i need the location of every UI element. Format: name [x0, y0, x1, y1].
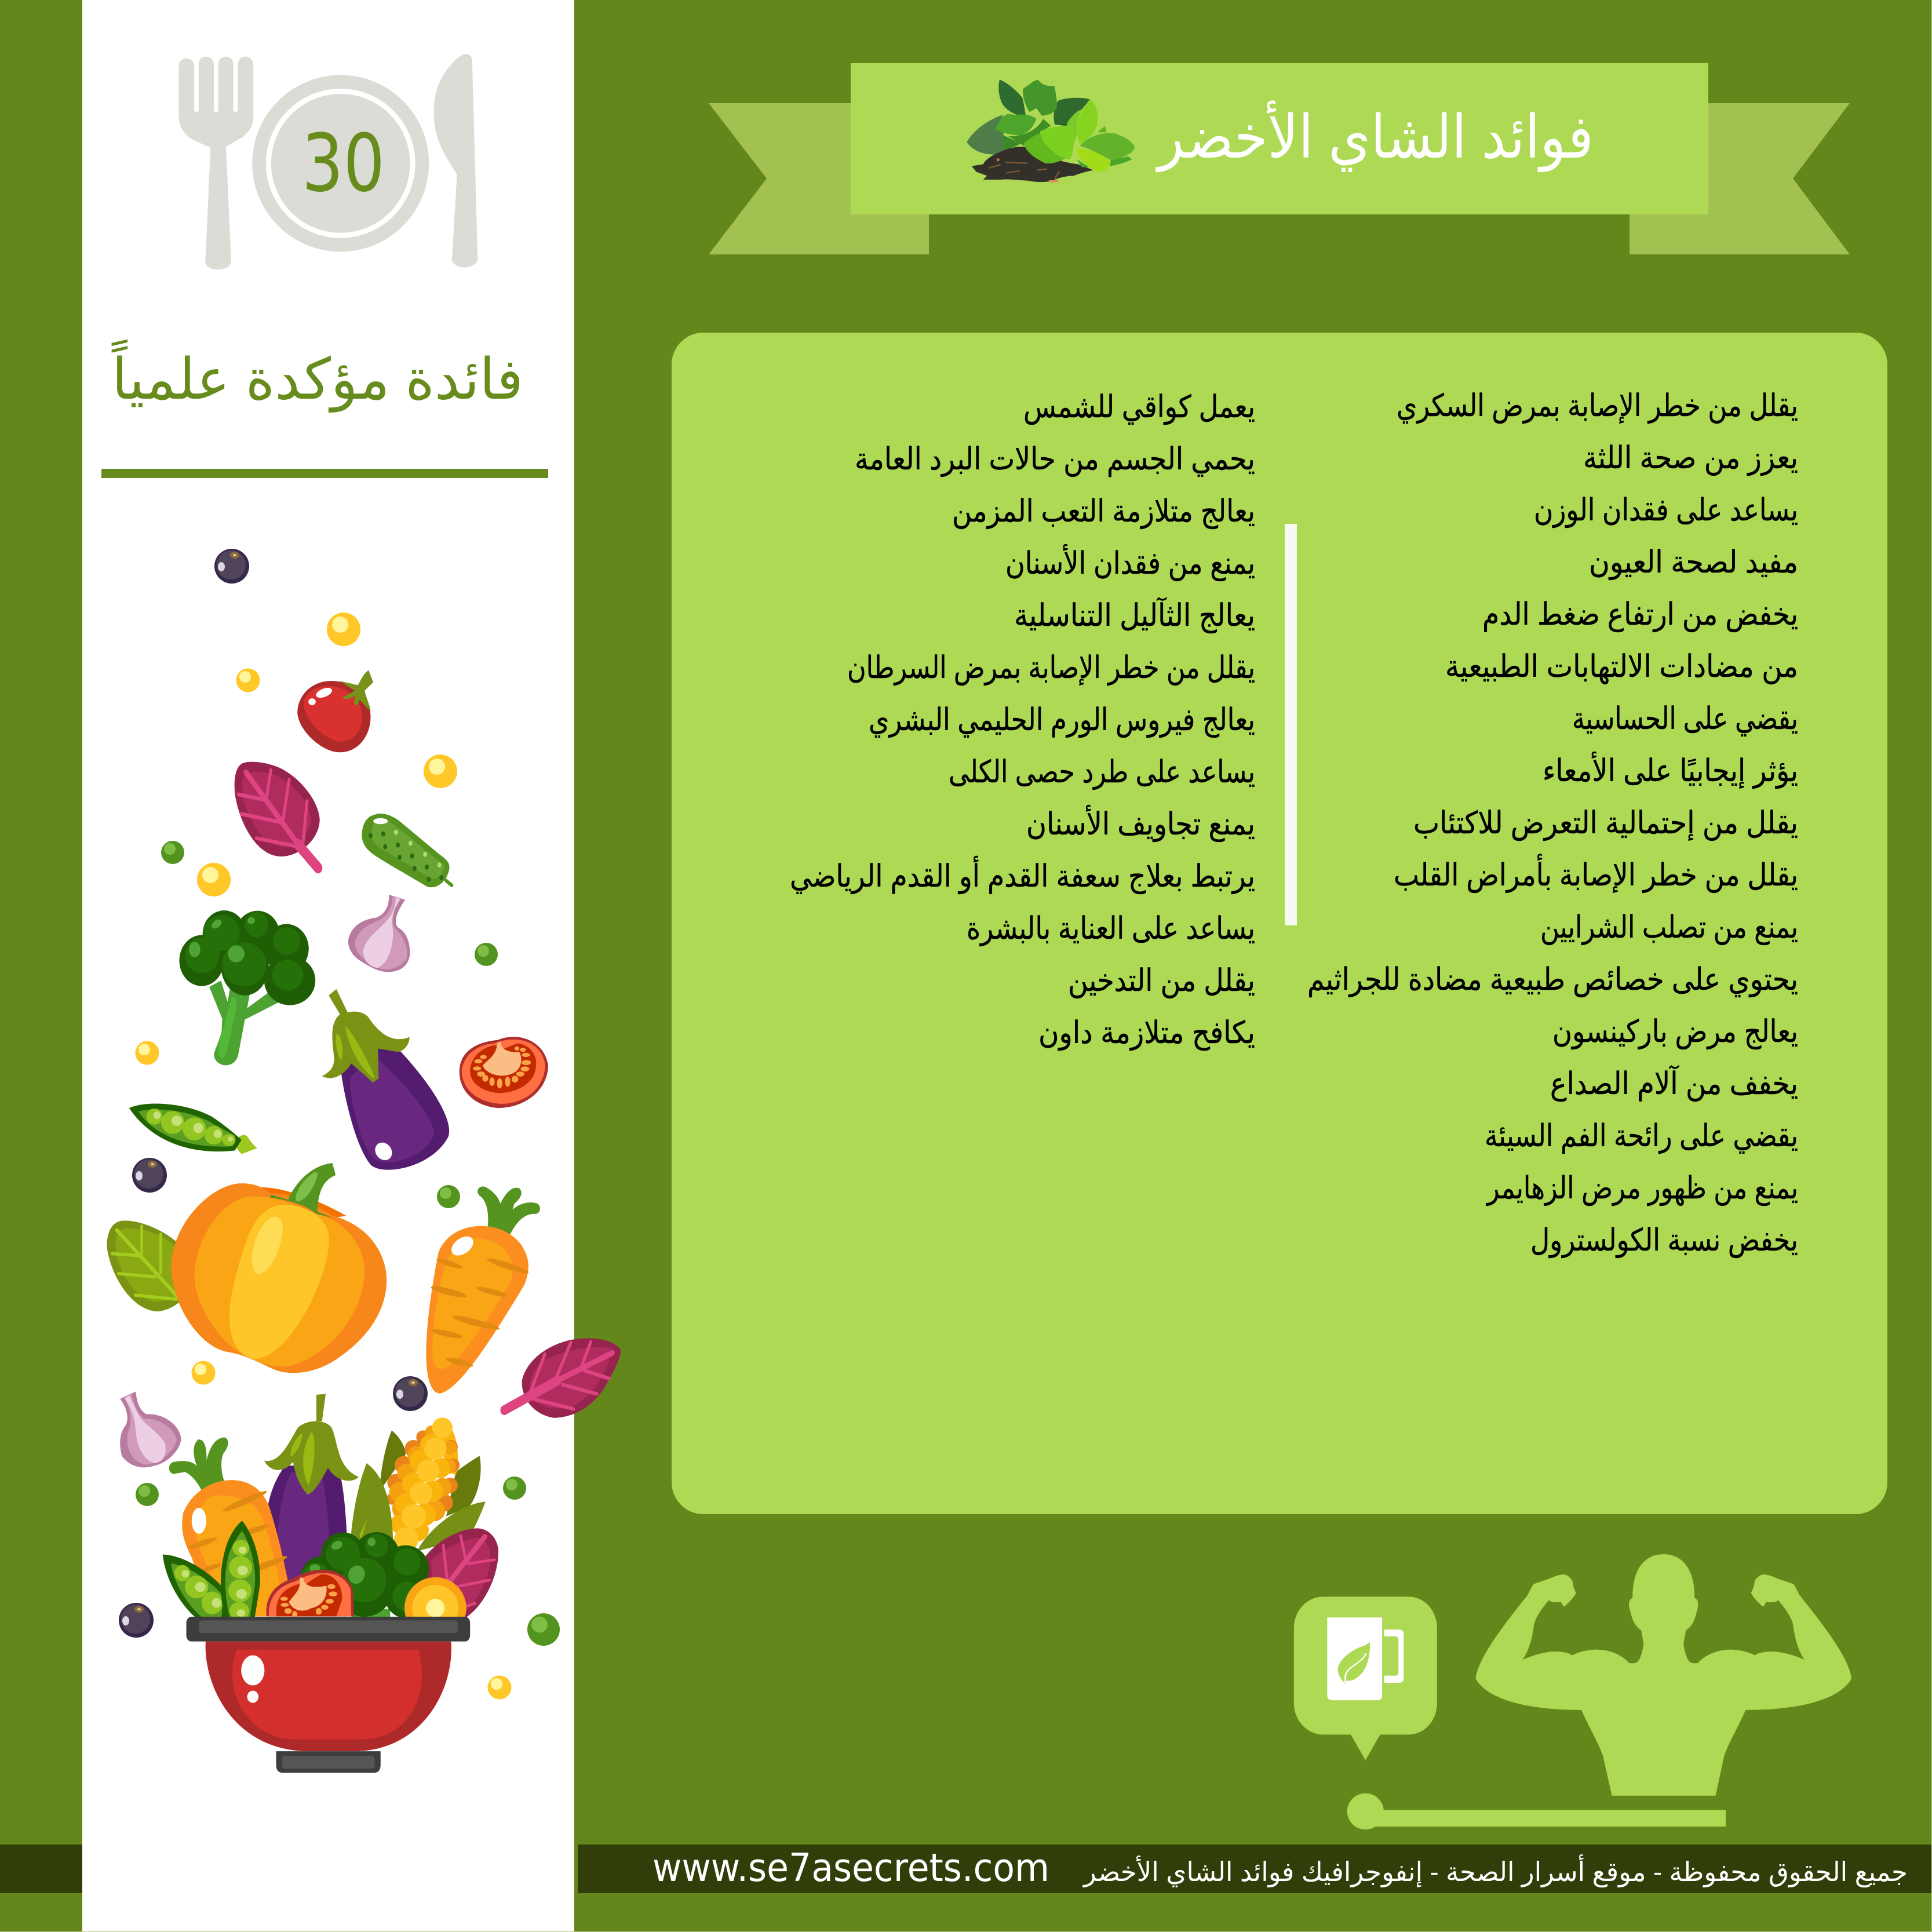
- icon: pumpkin: [171, 1163, 387, 1373]
- icon: red leaf overlapping green column: [504, 1338, 621, 1418]
- icon: red bowl: [187, 1617, 470, 1773]
- icon: eggplant: [322, 989, 449, 1170]
- footer: copyright text: جميع الحقوق محفوظة - موقع أسرار الصحة - إنفوجرافيك فوائد الشاي الأخضر: [1082, 1854, 1908, 1888]
- footer bar: right segment: [578, 1844, 1932, 1893]
- divider: sidebar underline: [101, 469, 548, 478]
- heading: sidebar title: فائدة مؤكدة علمياً: [111, 339, 523, 413]
- text block: right column of benefits: يخفض من ارتفاع ضغط الدم: [1482, 597, 1798, 632]
- text block: right column of benefits: يمنع من تصلب الشرايين: [1540, 910, 1798, 945]
- icon: pea pod: [129, 1103, 257, 1154]
- icon: tea leaves: [967, 79, 1135, 182]
- text block: right column of benefits: يعالج مرض باركينسون: [1552, 1015, 1798, 1049]
- text block: left column of benefits: [790, 390, 1255, 1051]
- text block: right column of benefits: يقلل من خطر الإصابة بمرض السكري: [1397, 389, 1798, 424]
- text block: left column of benefits: يمنع تجاويف الأسنان: [1026, 805, 1255, 842]
- text block: left column of benefits: يمنع من فقدان الأسنان: [1005, 544, 1255, 581]
- divider: column separator: [1285, 524, 1297, 925]
- text block: left column of benefits: يحمي الجسم من حالات البرد العامة: [855, 442, 1255, 477]
- icon: tomato: [297, 670, 373, 752]
- text block: left column of benefits: يعمل كواقي للشمس: [1023, 390, 1255, 425]
- text block: left column of benefits: يعالج متلازمة التعب المزمن: [952, 494, 1255, 529]
- illustration: upper falling vegetables: [129, 670, 548, 1170]
- text block: left column of benefits: يساعد على العناية بالبشرة: [967, 912, 1255, 946]
- banner: ribbon tails: [709, 103, 1850, 254]
- text block: right column of benefits: يعزز من صحة اللثة: [1583, 441, 1798, 476]
- text block: left column of benefits: يعالج الثآليل التناسلية: [1014, 597, 1255, 633]
- text block: right column of benefits: [1307, 389, 1798, 1258]
- text block: left column of benefits: يقلل من التدخين: [1068, 964, 1255, 998]
- footer bar: left segment: [0, 1844, 82, 1893]
- icon: plate with cutlery and number 30: [178, 54, 477, 269]
- banner: main ribbon: [851, 63, 1708, 214]
- icon: tomato slice: [460, 1037, 548, 1108]
- text block: left column of benefits: يقلل من خطر الإصابة بمرض السرطان: [847, 651, 1255, 686]
- text block: right column of benefits: يقضي على رائحة الفم السيئة: [1485, 1119, 1798, 1154]
- icon: carrot: [426, 1186, 540, 1394]
- text block: right column of benefits: يقلل من خطر الإصابة بأمراض القلب: [1394, 854, 1798, 893]
- text block: left column of benefits: يعالج فيروس الورم الحليمي البشري: [869, 703, 1255, 738]
- icon: plate with cutlery and number 30: 30: [302, 118, 385, 210]
- text block: right column of benefits: يساعد على فقدان الوزن: [1534, 493, 1798, 528]
- icon: cucumber: [362, 814, 452, 887]
- panel: white sidebar: [82, 0, 574, 1932]
- icon: garlic: [348, 895, 410, 972]
- icon: garlic: [120, 1391, 181, 1467]
- illustration: falling dots: [119, 549, 560, 1699]
- progress bar with knob: [1347, 1794, 1726, 1829]
- icon: green leaf: [107, 1220, 188, 1311]
- footer: website url: www.se7asecrets.com: [652, 1845, 1049, 1890]
- icon: tea mug speech bubble: [1294, 1596, 1437, 1760]
- text block: right column of benefits: يمنع من ظهور مرض الزهايمر: [1485, 1171, 1798, 1206]
- text block: right column of benefits: مفيد لصحة العيون: [1589, 545, 1798, 580]
- panel: benefits list: [672, 333, 1887, 1514]
- text block: right column of benefits: من مضادات الالتهابات الطبيعية: [1445, 650, 1798, 684]
- text block: left column of benefits: يساعد على طرد حصى الكلى: [949, 755, 1255, 790]
- icon: muscular body silhouette: [1476, 1554, 1851, 1796]
- text block: right column of benefits: يقلل من إحتمالية التعرض للاكتئاب: [1413, 806, 1798, 841]
- icon: broccoli: [179, 910, 315, 1065]
- text block: right column of benefits: يخفض نسبة الكولسترول: [1530, 1223, 1798, 1258]
- text block: right column of benefits: يحتوي على خصائص طبيعية مضادة للجراثيم: [1307, 963, 1798, 997]
- text block: right column of benefits: يؤثر إيجابيًا على الأمعاء: [1543, 752, 1798, 789]
- text block: left column of benefits: يكافح متلازمة داون: [1038, 1016, 1255, 1051]
- text block: left column of benefits: يرتبط بعلاج سعفة القدم أو القدم الرياضي: [790, 856, 1255, 894]
- icon: bowl contents: [163, 1394, 498, 1639]
- icon: red leaf: [235, 762, 320, 868]
- illustration: lower vegetables and bowl: [107, 1163, 621, 1773]
- text block: right column of benefits: يخفف من آلام الصداع: [1550, 1065, 1798, 1102]
- text block: right column of benefits: يقضي على الحساسية: [1572, 702, 1798, 737]
- heading: main title: فوائد الشاي الأخضر: [1155, 100, 1594, 173]
